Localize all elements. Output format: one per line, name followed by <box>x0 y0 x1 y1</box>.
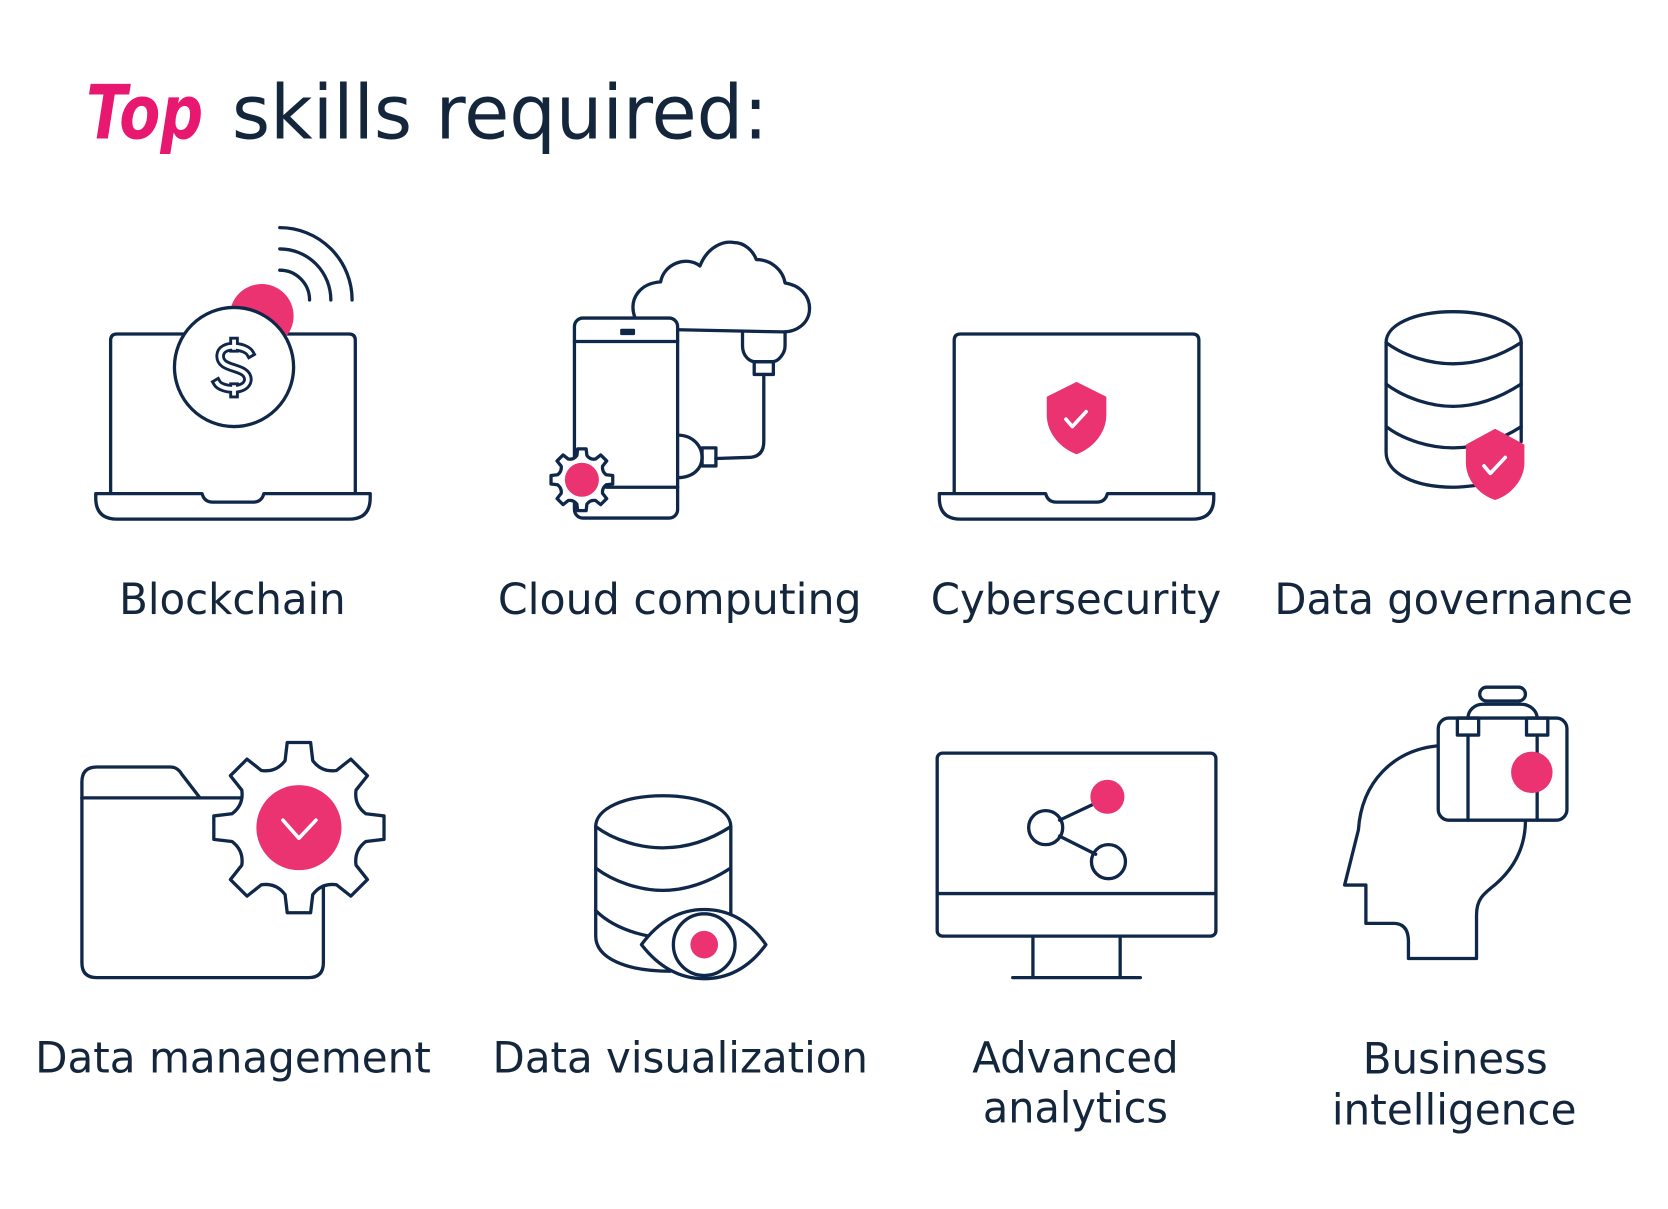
label: Business intelligence <box>1332 1035 1577 1135</box>
icon: business intelligence head with briefcase <box>1345 687 1567 958</box>
label: Data management: Data management <box>35 1034 431 1083</box>
label: Cybersecurity: Cybersecurity <box>931 576 1221 625</box>
title: Top <box>86 69 203 156</box>
label: Blockchain: Blockchain <box>119 576 346 625</box>
icon: data governance database with shield <box>1386 312 1524 500</box>
icon: advanced analytics monitor <box>937 753 1216 978</box>
icon: data management folder with gear <box>82 743 384 978</box>
label: Data visualization: Data visualization <box>493 1034 868 1083</box>
label: Advanced analytics: Advanced <box>972 1034 1179 1083</box>
icon: cloud computing phone <box>551 242 810 518</box>
icon: blockchain laptop with coin and signal <box>96 228 370 519</box>
label: Data governance: Data governance <box>1274 576 1633 625</box>
title: skills required: <box>232 69 768 156</box>
label: Business intelligence: Business <box>1363 1035 1548 1084</box>
label: Cloud computing: Cloud computing <box>498 576 862 625</box>
label: Advanced analytics <box>972 1034 1179 1133</box>
label: Advanced analytics: analytics <box>983 1084 1168 1133</box>
icon: cybersecurity laptop with shield <box>939 334 1214 519</box>
icon: data visualization database with eye <box>596 796 766 979</box>
label: Business intelligence: intelligence <box>1332 1086 1577 1135</box>
